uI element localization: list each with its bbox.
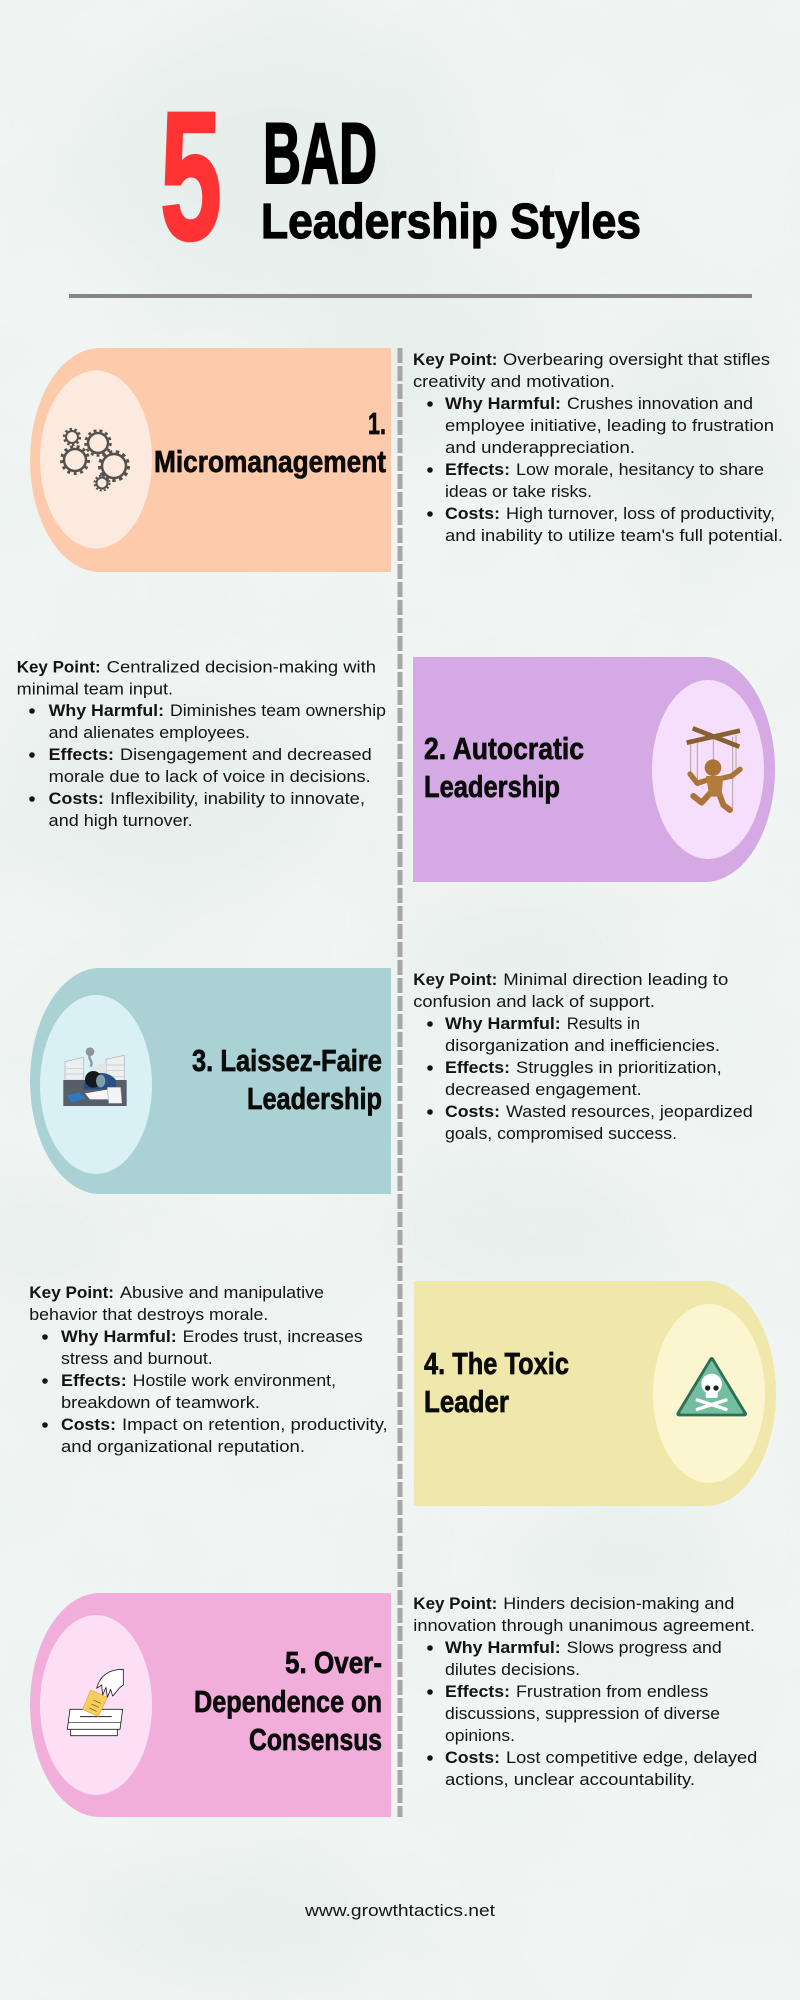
text block: Micromanagement details: Key Point: bbox=[413, 350, 498, 369]
panel heading bbox=[192, 1043, 382, 1116]
title numeral 5: 5 bbox=[160, 73, 222, 278]
text block: Micromanagement details: creativity and motivation. bbox=[413, 372, 615, 391]
text block: Toxic Leader details: Why Harmful: bbox=[61, 1327, 177, 1346]
panel heading: Micromanagement bbox=[154, 444, 386, 479]
panel heading bbox=[194, 1645, 382, 1757]
text block: Micromanagement details: Overbearing oversight that stifles bbox=[503, 350, 770, 369]
center dashed timeline bbox=[398, 348, 402, 1817]
text block: Autocratic details: minimal team input. bbox=[17, 680, 173, 698]
text block: Toxic Leader details: Hostile work environment, bbox=[133, 1371, 336, 1390]
text block: Toxic Leader details bbox=[29, 1283, 388, 1456]
text block: Consensus details: Lost competitive edge, delayed bbox=[506, 1748, 757, 1767]
text block: Laissez-Faire details bbox=[413, 970, 753, 1143]
panel heading: 3. Laissez-Faire bbox=[192, 1043, 382, 1078]
text block: Autocratic details: Why Harmful: bbox=[49, 701, 164, 720]
panel heading: Leadership bbox=[247, 1081, 382, 1116]
text block: Laissez-Faire details: decreased engagement. bbox=[445, 1080, 642, 1099]
icon: gears bbox=[62, 429, 128, 490]
text block: Micromanagement details: and underappreciation. bbox=[445, 438, 635, 457]
text block: Micromanagement details: Costs: bbox=[445, 504, 500, 523]
panel: 5 Over-Dependence on Consensus bbox=[30, 1593, 391, 1817]
title bbox=[160, 73, 641, 278]
text block: Laissez-Faire details: Results in bbox=[567, 1014, 640, 1033]
text block: Autocratic details: morale due to lack of voice in decisions. bbox=[49, 767, 371, 786]
title line Leadership Styles: Leadership Styles bbox=[261, 195, 641, 249]
panel heading: 4. The Toxic bbox=[424, 1346, 569, 1381]
text block: Toxic Leader details: Costs: bbox=[61, 1415, 116, 1434]
panel heading: Consensus bbox=[249, 1722, 382, 1757]
text block: Consensus details: Slows progress and bbox=[567, 1638, 722, 1657]
text block: Autocratic details: Centralized decision-making with bbox=[107, 658, 376, 677]
text block: Micromanagement details: ideas or take risks. bbox=[445, 482, 592, 501]
panel heading: Leader bbox=[424, 1384, 509, 1419]
text block: Toxic Leader details: stress and burnout. bbox=[61, 1349, 213, 1368]
text block: Autocratic details: Effects: bbox=[49, 745, 114, 764]
text block: Consensus details: Effects: bbox=[445, 1682, 510, 1701]
panel: 3 Laissez-Faire Leadership bbox=[30, 968, 391, 1194]
panel heading bbox=[424, 731, 584, 804]
panel heading bbox=[154, 406, 386, 479]
text block: Consensus details: Hinders decision-making and bbox=[503, 1594, 734, 1613]
text block: Consensus details: actions, unclear accountability. bbox=[445, 1770, 695, 1789]
text block: Micromanagement details: Effects: bbox=[445, 460, 510, 479]
text block: Toxic Leader details: breakdown of teamwork. bbox=[61, 1393, 260, 1412]
panel heading: 5. Over- bbox=[285, 1645, 382, 1680]
title divider line bbox=[69, 294, 752, 298]
text block: Consensus details: discussions, suppression of diverse bbox=[445, 1704, 720, 1723]
panel: 4 The Toxic Leader bbox=[414, 1281, 776, 1506]
panel: 2 Autocratic Leadership bbox=[413, 657, 775, 882]
text block: Autocratic details: Inflexibility, inability to innovate, bbox=[110, 789, 365, 808]
text block: Toxic Leader details: behavior that destroys morale. bbox=[29, 1305, 268, 1324]
text block: Laissez-Faire details: Minimal direction leading to bbox=[503, 970, 728, 989]
text block: Laissez-Faire details: goals, compromised success. bbox=[445, 1124, 677, 1143]
text block: Toxic Leader details: and organizational reputation. bbox=[61, 1437, 305, 1456]
panel heading: Dependence on bbox=[194, 1684, 382, 1719]
icon: toxic skull warning triangle bbox=[679, 1359, 745, 1414]
text block: Laissez-Faire details: Effects: bbox=[445, 1058, 510, 1077]
panel: 1 Micromanagement bbox=[30, 348, 391, 572]
panel heading: 1. bbox=[368, 406, 386, 441]
text block: Autocratic details bbox=[17, 658, 386, 830]
text block: Autocratic details: Disengagement and decreased bbox=[120, 745, 372, 764]
text block: Laissez-Faire details: Struggles in prioritization, bbox=[516, 1058, 722, 1077]
text block: Laissez-Faire details: Costs: bbox=[445, 1102, 500, 1121]
text block: Laissez-Faire details: Why Harmful: bbox=[445, 1014, 561, 1033]
text block: Micromanagement details bbox=[413, 350, 783, 545]
text block: Autocratic details: Diminishes team ownership bbox=[170, 701, 386, 720]
text block: Autocratic details: and alienates employees. bbox=[49, 723, 250, 742]
text block: Laissez-Faire details: Key Point: bbox=[413, 970, 497, 989]
text block: Micromanagement details: employee initiative, leading to frustration bbox=[445, 416, 774, 435]
panel heading: 2. Autocratic bbox=[424, 731, 584, 766]
text block: Micromanagement details: and inability to utilize team's full potential. bbox=[445, 526, 783, 545]
text block: Consensus details: Why Harmful: bbox=[445, 1638, 561, 1657]
text block: Laissez-Faire details: disorganization and inefficiencies. bbox=[445, 1036, 720, 1055]
text block: Toxic Leader details: Effects: bbox=[61, 1371, 127, 1390]
panel heading: Leadership bbox=[424, 769, 560, 804]
text block: Micromanagement details: Crushes innovation and bbox=[567, 394, 753, 413]
text block: Micromanagement details: High turnover, loss of productivity, bbox=[506, 504, 775, 523]
text block: Consensus details: Frustration from endless bbox=[516, 1682, 708, 1701]
text block: Consensus details: innovation through unanimous agreement. bbox=[413, 1616, 755, 1635]
title word BAD: BAD bbox=[263, 106, 377, 202]
text block: Toxic Leader details: Key Point: bbox=[29, 1283, 114, 1302]
text block: Consensus details bbox=[413, 1594, 757, 1789]
text block: Consensus details: dilutes decisions. bbox=[445, 1660, 580, 1679]
text block: Micromanagement details: Low morale, hesitancy to share bbox=[516, 460, 764, 479]
text block: Autocratic details: and high turnover. bbox=[49, 811, 193, 830]
icon: marionette puppet bbox=[687, 728, 740, 810]
text block: Toxic Leader details: Impact on retention, productivity, bbox=[122, 1415, 388, 1434]
text block: Toxic Leader details: Abusive and manipulative bbox=[120, 1283, 324, 1302]
icon: hand casting ballot bbox=[67, 1669, 123, 1736]
text block: Laissez-Faire details: confusion and lack of support. bbox=[413, 992, 655, 1011]
panel heading bbox=[424, 1346, 569, 1419]
text block: Laissez-Faire details: Wasted resources, jeopardized bbox=[506, 1102, 753, 1121]
text block: Consensus details: Key Point: bbox=[413, 1594, 497, 1613]
text block: Autocratic details: Key Point: bbox=[17, 658, 101, 677]
text block: Consensus details: opinions. bbox=[445, 1726, 515, 1745]
text block: Autocratic details: Costs: bbox=[49, 789, 104, 808]
icon: exhausted worker at desk bbox=[63, 1047, 127, 1106]
text block: Consensus details: Costs: bbox=[445, 1748, 500, 1767]
footer website: www.growthtactics.net bbox=[304, 1901, 495, 1920]
text block: Toxic Leader details: Erodes trust, increases bbox=[183, 1327, 363, 1346]
text block: Micromanagement details: Why Harmful: bbox=[445, 394, 561, 413]
